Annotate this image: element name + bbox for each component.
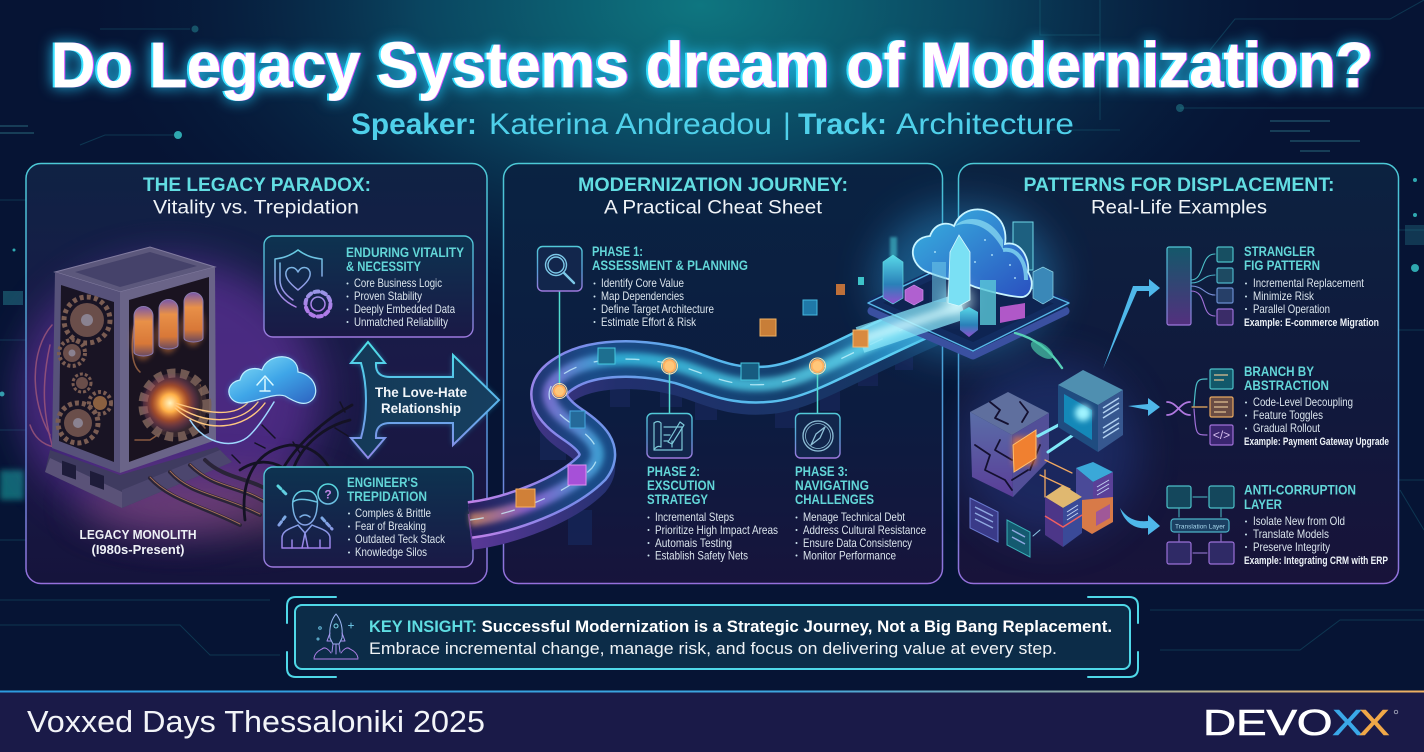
icon: rocket: [314, 614, 358, 659]
bullet list: Gradual Rollout: [1253, 422, 1321, 435]
subtitle: speaker and track: Track:: [798, 108, 887, 141]
arrow: to anti-corruption layer: [1120, 508, 1160, 535]
bullet list: Fear of Breaking: [355, 520, 426, 533]
bullet list: Deeply Embedded Data: [354, 303, 455, 316]
bullet list: [594, 277, 714, 329]
pattern: anti-corruption layer: LAYER: [1244, 497, 1282, 512]
illustration: legacy monolith machine: [30, 247, 275, 525]
panel: the legacy paradox: [20, 164, 499, 584]
diagram: anti-corruption layer: Translation Layer: [1175, 524, 1226, 530]
arrow: to strangler fig: [1103, 279, 1160, 369]
subtitle: speaker and track: Speaker:: [351, 108, 477, 141]
data card on bright road: [853, 330, 868, 347]
bullet list: Proven Stability: [354, 290, 422, 303]
panel: modernization journey: [470, 164, 1069, 584]
arrow label: [375, 385, 467, 416]
label: legacy monolith: LEGACY MONOLITH: [80, 527, 196, 542]
heading: the legacy paradox: THE LEGACY PARADOX:: [143, 175, 371, 196]
bullet list: [1244, 396, 1389, 448]
beams: [1038, 412, 1088, 452]
insight text: Embrace incremental change, manage risk, and focus on delivering value at every step.: [369, 639, 1057, 658]
illustration: thorns: [232, 402, 352, 520]
pattern: strangler fig: FIG PATTERN: [1244, 258, 1320, 273]
panel: patterns for displacement: [958, 164, 1398, 584]
bullet list: Code-Level Decoupling: [1253, 396, 1353, 409]
screens: [970, 498, 1040, 557]
icon: compass: [796, 414, 840, 458]
arrow label: The Love-Hate: [375, 385, 467, 400]
road nodes and connectors: [552, 291, 826, 413]
data cards on road: [516, 277, 864, 507]
title: Do Legacy Systems dream of Modernization?: [51, 29, 1373, 101]
callout: engineer's trepidation: TREPIDATION: [347, 489, 427, 504]
pattern: anti-corruption layer: [1167, 482, 1388, 567]
diagram: branch by abstraction: </>: [1213, 428, 1230, 442]
bullet list: [1244, 515, 1388, 567]
bullet list: Minimize Risk: [1253, 290, 1314, 303]
subtitle: speaker and track: [351, 108, 1074, 141]
cracked cube: [970, 392, 1049, 497]
bullet list: Establish Safety Nets: [655, 550, 748, 562]
callout: enduring vitality and necessity: [264, 236, 473, 337]
callout: engineer's trepidation: ?: [324, 488, 332, 502]
heading: modernization journey: A Practical Cheat Sheet: [604, 196, 823, 218]
bullet list: Outdated Teck Stack: [355, 533, 445, 546]
bullet list: Translate Models: [1253, 528, 1329, 541]
bullet list: Ensure Data Consistency: [803, 537, 912, 550]
insight text: Successful Modernization is a Strategic Journey, Not a Big Bang Replacement.: [482, 617, 1112, 636]
subtitle: speaker and track: Architecture: [896, 108, 1074, 141]
bullet list: [346, 277, 455, 329]
bullet list: Define Target Architecture: [601, 303, 714, 316]
diagram: anti-corruption layer: [1167, 486, 1234, 564]
subtitle: speaker and track: |: [783, 108, 791, 141]
pattern: strangler fig: [1167, 244, 1379, 329]
subtitle: speaker and track: Katerina Andreadou: [489, 108, 772, 141]
bright road segment over platform: [860, 306, 962, 340]
callout: engineer's trepidation: ENGINEER'S: [347, 475, 418, 490]
callout: enduring vitality and necessity: & NECESSITY: [346, 259, 421, 274]
heading: patterns for displacement: Real-Life Examples: [1091, 196, 1267, 218]
bullet list: Menage Technical Debt: [803, 511, 906, 524]
bullet list: Incremental Replacement: [1253, 277, 1365, 290]
gears: [58, 297, 205, 443]
phase 2: execution strategy: [647, 414, 778, 562]
pattern: branch by abstraction: BRANCH BY: [1244, 364, 1314, 379]
heading: the legacy paradox: [143, 175, 371, 218]
bullet list: Address Cultural Resistance: [803, 524, 926, 537]
bullet list: Preserve Integrity: [1253, 541, 1330, 554]
icon: blueprint: [647, 414, 692, 458]
illustration: winding road: [470, 277, 965, 545]
pattern: branch by abstraction: [1167, 364, 1389, 448]
event name: Voxxed Days Thessaloniki 2025: [27, 704, 485, 739]
pattern: branch by abstraction: ABSTRACTION: [1244, 378, 1329, 393]
phase 1: assessment and planning: ASSESSMENT & PLANNING: [592, 258, 748, 273]
heading: patterns for displacement: [1024, 175, 1334, 218]
arrow label: Relationship: [381, 401, 461, 416]
footer bar: [0, 690, 1424, 752]
phase 2: execution strategy: STRATEGY: [647, 492, 708, 507]
heading: modernization journey: [578, 175, 848, 218]
heading: modernization journey: MODERNIZATION JOURNEY:: [578, 175, 848, 196]
bullet list: [348, 507, 445, 559]
phase 3: navigating challenges: PHASE 3:: [795, 464, 848, 479]
diagram: strangler fig: [1167, 247, 1233, 325]
bullet list: [796, 511, 926, 562]
arrow: to branch by abstraction: [1128, 398, 1160, 416]
illustration: cloud city platform: [853, 205, 1069, 368]
icon: shield with heart and gear: [275, 250, 330, 316]
label: legacy monolith: [80, 527, 196, 557]
bullet list: Example: Integrating CRM with ERP: [1244, 555, 1388, 567]
pattern: strangler fig: STRANGLER: [1244, 244, 1315, 259]
bullet list: Automais Testing: [655, 537, 732, 550]
illustration: cloud with energy streams: [175, 357, 316, 443]
new service server: [1058, 370, 1123, 452]
bullet list: Incremental Steps: [655, 511, 734, 524]
phase 1: assessment and planning: [538, 244, 748, 329]
phase 3: navigating challenges: [795, 414, 926, 562]
bullet list: Prioritize High Impact Areas: [655, 524, 778, 537]
phase 1: assessment and planning: PHASE 1:: [592, 244, 643, 259]
insight text: [369, 617, 1112, 658]
bullet list: Knowledge Silos: [355, 546, 427, 559]
phase 2: execution strategy: EXSCUTION: [647, 478, 715, 493]
icon: magnifying glass: [538, 246, 582, 291]
bullet list: Map Dependencies: [601, 290, 684, 303]
bullet list: Identify Core Value: [601, 277, 684, 290]
logo: devoxx: DEVOXX: [1203, 702, 1389, 743]
cables: [150, 460, 275, 525]
glowing core: [140, 373, 207, 437]
callout: engineer's trepidation: [264, 467, 473, 567]
diagram: branch by abstraction: [1167, 369, 1233, 445]
bullet list: Estimate Effort & Risk: [601, 316, 696, 329]
bullet list: [648, 511, 778, 562]
orange data flows: [1040, 460, 1072, 497]
bullet list: Unmatched Reliability: [354, 316, 448, 329]
bullet list: Parallel Operation: [1253, 303, 1330, 316]
icon: worried engineer: [278, 484, 338, 548]
phase 2: execution strategy: PHASE 2:: [647, 464, 700, 479]
phase 3: navigating challenges: CHALLENGES: [795, 492, 874, 507]
arrow: love-hate relationship: [351, 342, 499, 458]
illustration: displacing a cracked monolith: [960, 360, 1140, 557]
pattern: anti-corruption layer: ANTI-CORRUPTION: [1244, 482, 1356, 498]
road pillars: [540, 345, 913, 545]
bullet list: Example: E-commerce Migration: [1244, 317, 1379, 329]
energy leaf cable: [1015, 333, 1062, 368]
bullet list: Isolate New from Old: [1253, 515, 1345, 528]
callout: enduring vitality and necessity: ENDURING VITALITY: [346, 245, 464, 260]
vacuum tubes: [132, 292, 204, 360]
bullet list: Feature Toggles: [1253, 409, 1323, 422]
callout: key insight: [287, 597, 1138, 677]
bullet list: Monitor Performance: [803, 550, 896, 562]
phase 3: navigating challenges: NAVIGATING: [795, 478, 869, 493]
heading: patterns for displacement: PATTERNS FOR DISPLACEMENT:: [1024, 175, 1334, 196]
heading: the legacy paradox: Vitality vs. Trepidation: [153, 196, 359, 218]
insight text: KEY INSIGHT:: [369, 617, 477, 636]
bullet list: Comples & Brittle: [355, 507, 431, 520]
label: legacy monolith: (I980s-Present): [92, 542, 184, 557]
bullet list: [1244, 277, 1379, 329]
microservice blocks: [1045, 462, 1113, 547]
bullet list: Core Business Logic: [354, 277, 442, 290]
